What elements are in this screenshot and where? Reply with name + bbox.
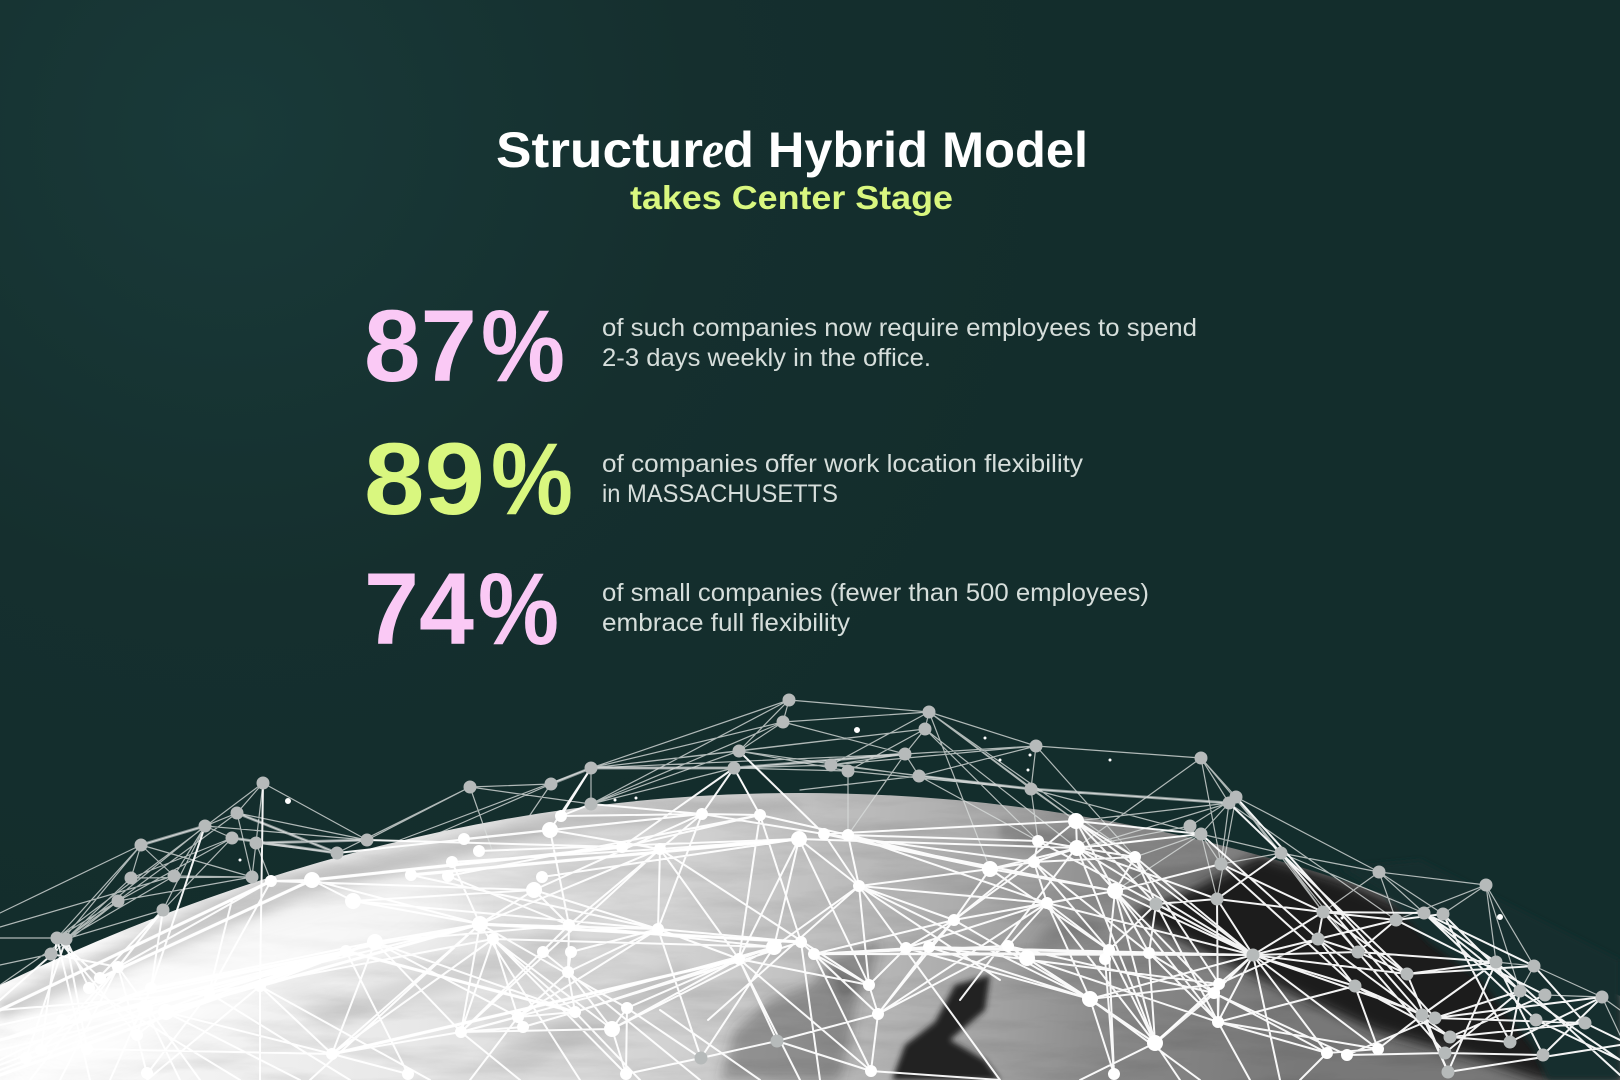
title <box>496 122 1088 179</box>
stat description 89%: of companies offer work location flexibility <box>602 450 1084 478</box>
thick bright strokes <box>0 839 1214 1075</box>
stat description 74%: of small companies (fewer than 500 employees) <box>602 579 1149 607</box>
white nodes large <box>145 821 1155 1043</box>
stat number 87%: % <box>481 289 565 403</box>
title: d Hybrid Model <box>723 122 1088 178</box>
small star particles <box>240 738 1342 918</box>
stat number 89%: % <box>491 422 573 536</box>
outer connection lines <box>0 700 1620 1035</box>
stat description 89%: in MASSACHUSETTS <box>602 480 838 508</box>
stat row: 87% <box>364 289 1197 403</box>
network mesh <box>0 700 1620 1080</box>
stat row: 74% <box>364 552 1149 666</box>
earth globe <box>0 780 1620 1080</box>
title: Structur <box>496 122 703 178</box>
white nodes medium <box>26 814 1378 1074</box>
inner connection lines <box>0 751 1620 1080</box>
stat description 87% <box>602 314 1197 372</box>
outer gray nodes <box>51 700 1602 1072</box>
stat description 74%: embrace full flexibility <box>602 609 851 637</box>
stat description 89% <box>602 450 1084 508</box>
stat number 74%: 74 <box>364 552 474 666</box>
stat description 87%: 2-3 days weekly in the office. <box>602 344 931 372</box>
title: e <box>702 122 724 179</box>
stat description 87%: of such companies now require employees to spend <box>602 314 1197 342</box>
stat number 87%: 87 <box>364 289 477 403</box>
stat number 89%: 89 <box>364 422 485 536</box>
stat row: 89% <box>364 422 1084 536</box>
stat description 74% <box>602 579 1149 637</box>
stat number 74%: % <box>478 552 559 666</box>
bright bundled lines <box>141 754 1229 853</box>
subtitle: takes Center Stage <box>630 179 953 216</box>
